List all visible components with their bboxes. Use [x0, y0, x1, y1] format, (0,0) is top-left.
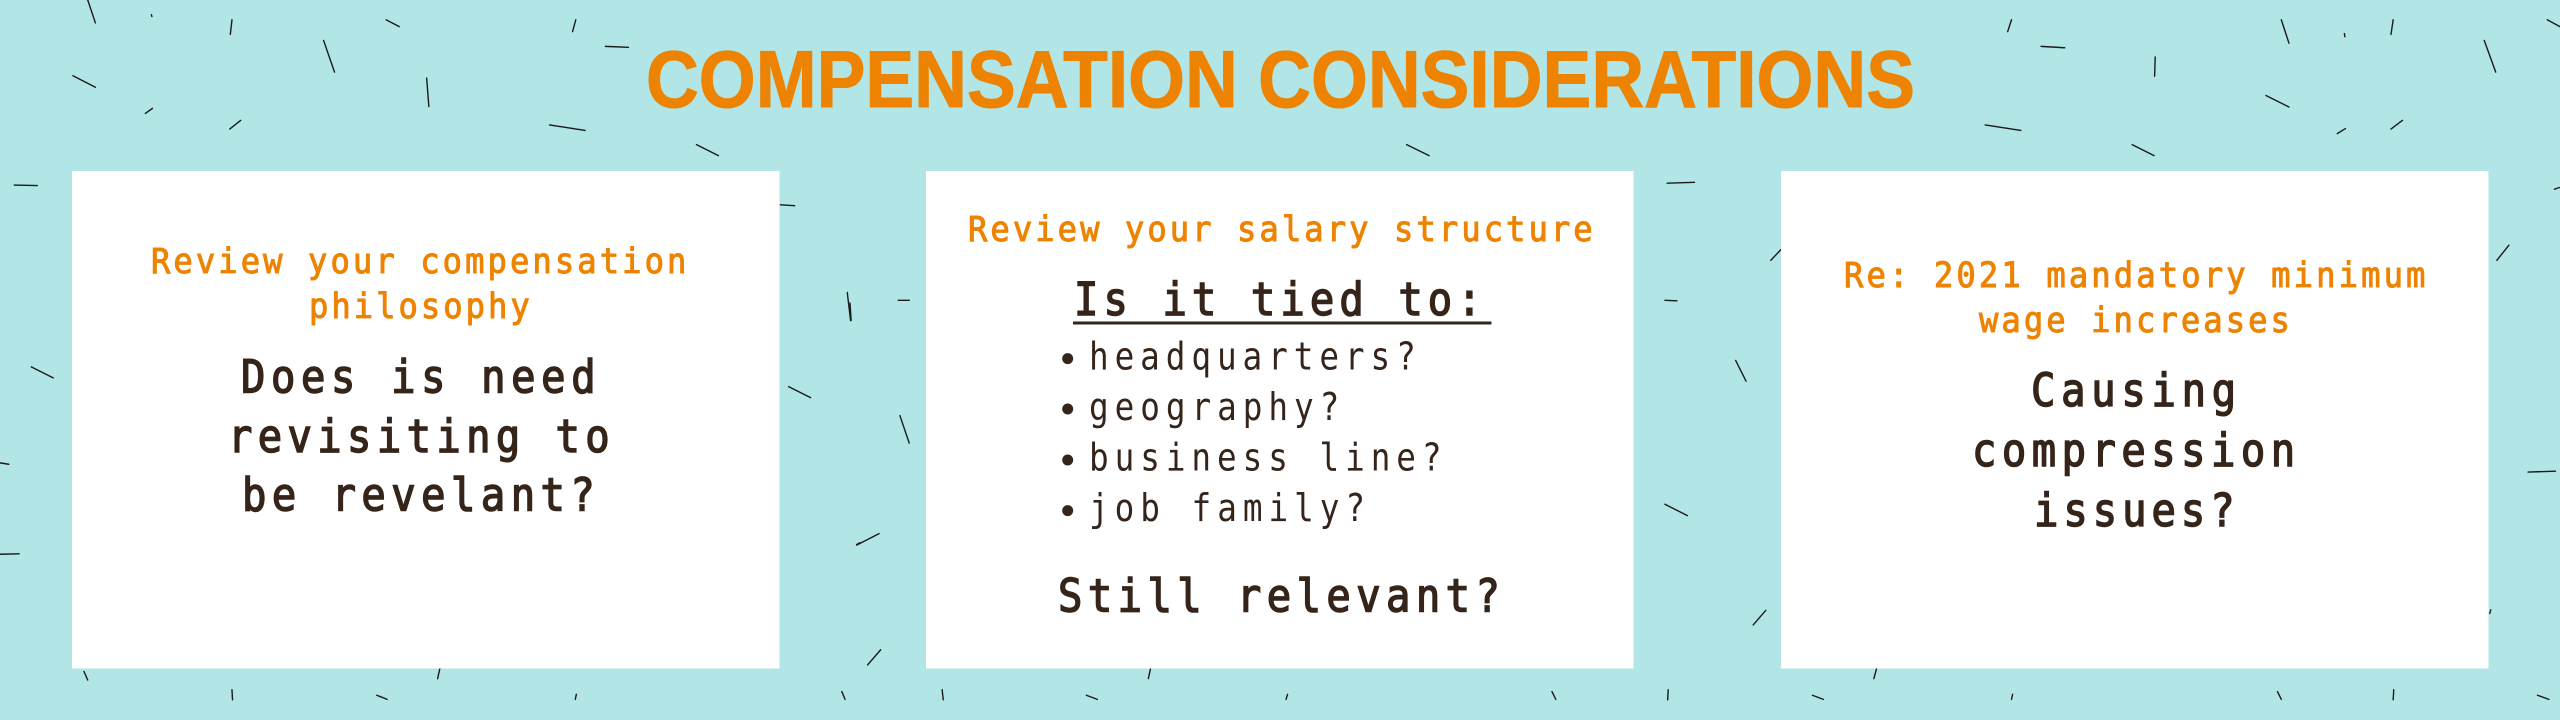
- bullet list: salary structure factors: headquarters?: [1089, 335, 1416, 379]
- panel heading: compensation philosophy: Review your compensation: [151, 241, 686, 281]
- panel heading: compensation philosophy: [151, 241, 686, 326]
- bullet list: salary structure factors: [1062, 335, 1442, 531]
- panel: compensation philosophy: [72, 171, 780, 668]
- subheading: is it tied to: Is it tied to:: [1074, 274, 1482, 327]
- question text: revisiting philosophy: revisiting to: [228, 411, 610, 464]
- panel heading: salary structure: Review your salary structure: [968, 209, 1593, 249]
- question text: revisiting philosophy: [228, 352, 610, 522]
- bullet list: salary structure factors: business line?: [1089, 436, 1442, 480]
- question text: compression issues: Causing: [2031, 365, 2236, 418]
- panel: salary structure: [926, 171, 1634, 668]
- panel heading: compensation philosophy: philosophy: [309, 286, 530, 326]
- question text: compression issues: [1972, 365, 2295, 538]
- question text: revisiting philosophy: Does is need: [241, 352, 596, 404]
- panel heading: minimum wage increases: [1844, 255, 2425, 340]
- question text: still relevant: Still relevant?: [1058, 571, 1500, 623]
- panel heading: minimum wage increases: wage increases: [1979, 300, 2290, 340]
- bullet list: salary structure factors: geography?: [1089, 386, 1339, 430]
- panel: minimum wage: [1781, 171, 2488, 668]
- question text: revisiting philosophy: be revelant?: [242, 470, 595, 522]
- bullet list: salary structure factors: job family?: [1089, 487, 1365, 531]
- title: COMPENSATION CONSIDERATIONS: [646, 35, 1915, 125]
- question text: compression issues: issues?: [2034, 485, 2235, 538]
- question text: compression issues: compression: [1972, 425, 2295, 478]
- panel heading: minimum wage increases: Re: 2021 mandatory minimum: [1844, 255, 2425, 295]
